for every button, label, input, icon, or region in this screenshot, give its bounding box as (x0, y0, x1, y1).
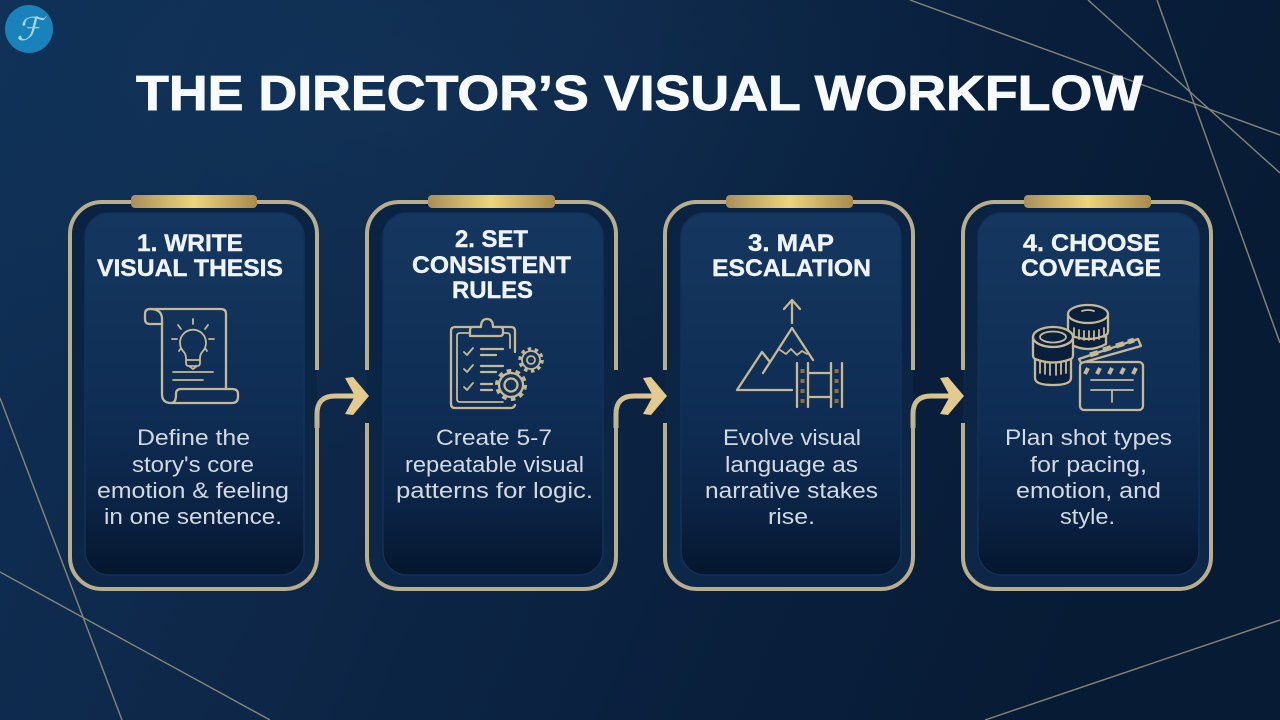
arrow 3 to 4 (913, 377, 964, 428)
heading 4: COVERAGE (1021, 255, 1161, 282)
logo badge: ℱ (16, 11, 47, 47)
heading 4 (1021, 230, 1161, 282)
heading 1 (97, 230, 283, 282)
heading 3 (712, 230, 871, 282)
description 4: Plan shot types (1005, 425, 1172, 450)
panel: step 3 map escalation (665, 195, 913, 590)
heading 3: 3. MAP (748, 230, 834, 257)
panel: step 2 set consistent rules (367, 195, 616, 590)
arrow 2 to 3 (616, 377, 667, 428)
description 3 (705, 425, 878, 529)
description 2: Create 5-7 (436, 425, 552, 450)
icon: camera lenses and clapperboard (1033, 305, 1143, 410)
heading 1: VISUAL THESIS (97, 255, 283, 282)
description 2: repeatable visual (405, 452, 584, 477)
title: THE DIRECTOR’S VISUAL WORKFLOW (136, 67, 1144, 121)
icon: clipboard with gears (451, 319, 542, 408)
card panel 3 (665, 195, 913, 590)
description 1: in one sentence. (104, 504, 282, 529)
description 4 (1005, 425, 1172, 529)
icon: scroll with light bulb (145, 309, 238, 403)
description 3: rise. (768, 504, 815, 529)
description 3: language as (725, 452, 858, 477)
description 1: emotion & feeling (97, 478, 289, 503)
description 3: Evolve visual (723, 425, 861, 450)
decorative gold line bottom right (985, 620, 1280, 720)
icon: mountain and film strip (737, 300, 842, 407)
description 2 (396, 425, 593, 503)
heading 4: 4. CHOOSE (1023, 230, 1160, 257)
description 3: narrative stakes (705, 478, 878, 503)
description 4: for pacing, (1030, 452, 1147, 477)
card panel 1 (70, 195, 317, 590)
heading 2: RULES (452, 277, 533, 304)
heading 2: CONSISTENT (412, 252, 571, 279)
card panel 4 (963, 195, 1211, 590)
panel: step 1 write visual thesis (70, 195, 317, 590)
description 1 (97, 425, 289, 529)
card panel 2 (367, 195, 616, 590)
heading 1: 1. WRITE (137, 230, 243, 257)
description 1: story's core (132, 452, 254, 477)
decorative gold lines bottom left (0, 398, 270, 720)
description 4: style. (1060, 504, 1115, 529)
logo badge (5, 5, 53, 53)
heading 2 (412, 226, 571, 304)
decorative gold lines top right (910, 0, 1280, 343)
description 4: emotion, and (1016, 478, 1161, 503)
description 1: Define the (137, 425, 250, 450)
description 2: patterns for logic. (396, 478, 593, 503)
arrow 1 to 2 (317, 377, 369, 428)
panel: step 4 choose coverage (963, 195, 1211, 590)
heading 3: ESCALATION (712, 255, 871, 282)
heading 2: 2. SET (455, 226, 528, 253)
